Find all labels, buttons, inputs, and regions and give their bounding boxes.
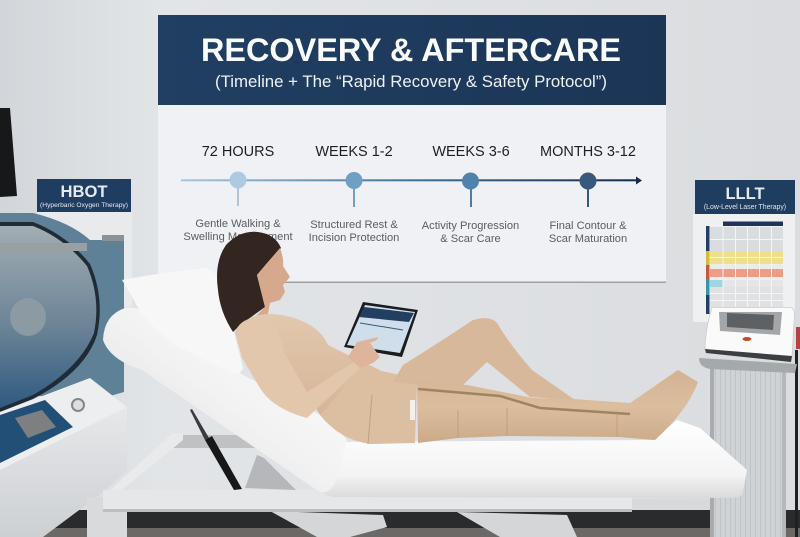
LLLT sign with chart: (Low-Level Laser Therapy) (704, 204, 786, 211)
stage: weeks 3-6: Activity Progression (422, 220, 519, 232)
stage: weeks 3-6: WEEKS 3-6 (432, 144, 510, 160)
stage: 72 hours (183, 144, 293, 243)
stage: months 3-12: Scar Maturation (549, 233, 627, 245)
stage: weeks 1-2 (309, 144, 399, 244)
HBOT sign: (Hyperbaric Oxygen Therapy) (40, 202, 128, 209)
bed frame (87, 490, 710, 537)
subtitle: (Timeline + The “Rapid Recovery & Safety Protocol”) (215, 73, 607, 91)
gas strut (190, 409, 209, 440)
stage: 72 hours: Gentle Walking & (195, 218, 281, 230)
arm (235, 318, 360, 418)
hips (320, 366, 417, 444)
patient in compression garments (217, 232, 698, 444)
pillow (122, 268, 243, 374)
device shelf (699, 358, 797, 373)
tablet showing timeline (344, 302, 418, 368)
torso (250, 314, 380, 415)
stage: weeks 1-2: Structured Rest & (310, 219, 398, 231)
poster header band (158, 15, 666, 105)
stage: weeks 3-6: & Scar Care (440, 233, 501, 245)
device pedestal (710, 368, 786, 537)
LLLT sign with chart: LLLT (726, 184, 765, 203)
HBOT sign: HBOT (60, 182, 108, 201)
straight leg with boot (417, 370, 698, 443)
boot zip (418, 389, 630, 414)
timeline axis arrow (181, 176, 642, 184)
stage: months 3-12: MONTHS 3-12 (540, 144, 636, 160)
wall monitor (0, 108, 17, 197)
stage: 72 hours: Swelling Management (183, 231, 293, 243)
neck and face (250, 248, 290, 322)
bent leg (393, 318, 575, 400)
device body (705, 308, 794, 357)
boot seams (368, 395, 617, 444)
control panel (0, 400, 73, 463)
stage: months 3-12 (540, 144, 636, 245)
poster: recovery timeline (158, 15, 666, 283)
backrest mattress (103, 308, 347, 492)
power cable (795, 350, 798, 537)
lower mattress (323, 420, 747, 498)
stage: weeks 1-2: Incision Protection (309, 232, 399, 244)
treatment table (706, 222, 783, 314)
stage: months 3-12: Final Contour & (549, 220, 627, 232)
treatment bed (87, 308, 747, 537)
stage: weeks 1-2: WEEKS 1-2 (315, 144, 393, 160)
laser therapy device (699, 308, 800, 537)
title: RECOVERY & AFTERCARE (201, 32, 621, 68)
hair (217, 232, 281, 332)
LLLT sign with chart (693, 180, 795, 322)
stage: 72 hours: 72 HOURS (202, 144, 274, 160)
hyperbaric chamber (0, 213, 124, 412)
chamber control console (0, 378, 127, 537)
device screen (719, 312, 782, 335)
bed frame rear (110, 409, 577, 537)
hand tap (348, 337, 380, 368)
HBOT sign (37, 179, 132, 307)
stage: weeks 3-6 (422, 144, 519, 245)
